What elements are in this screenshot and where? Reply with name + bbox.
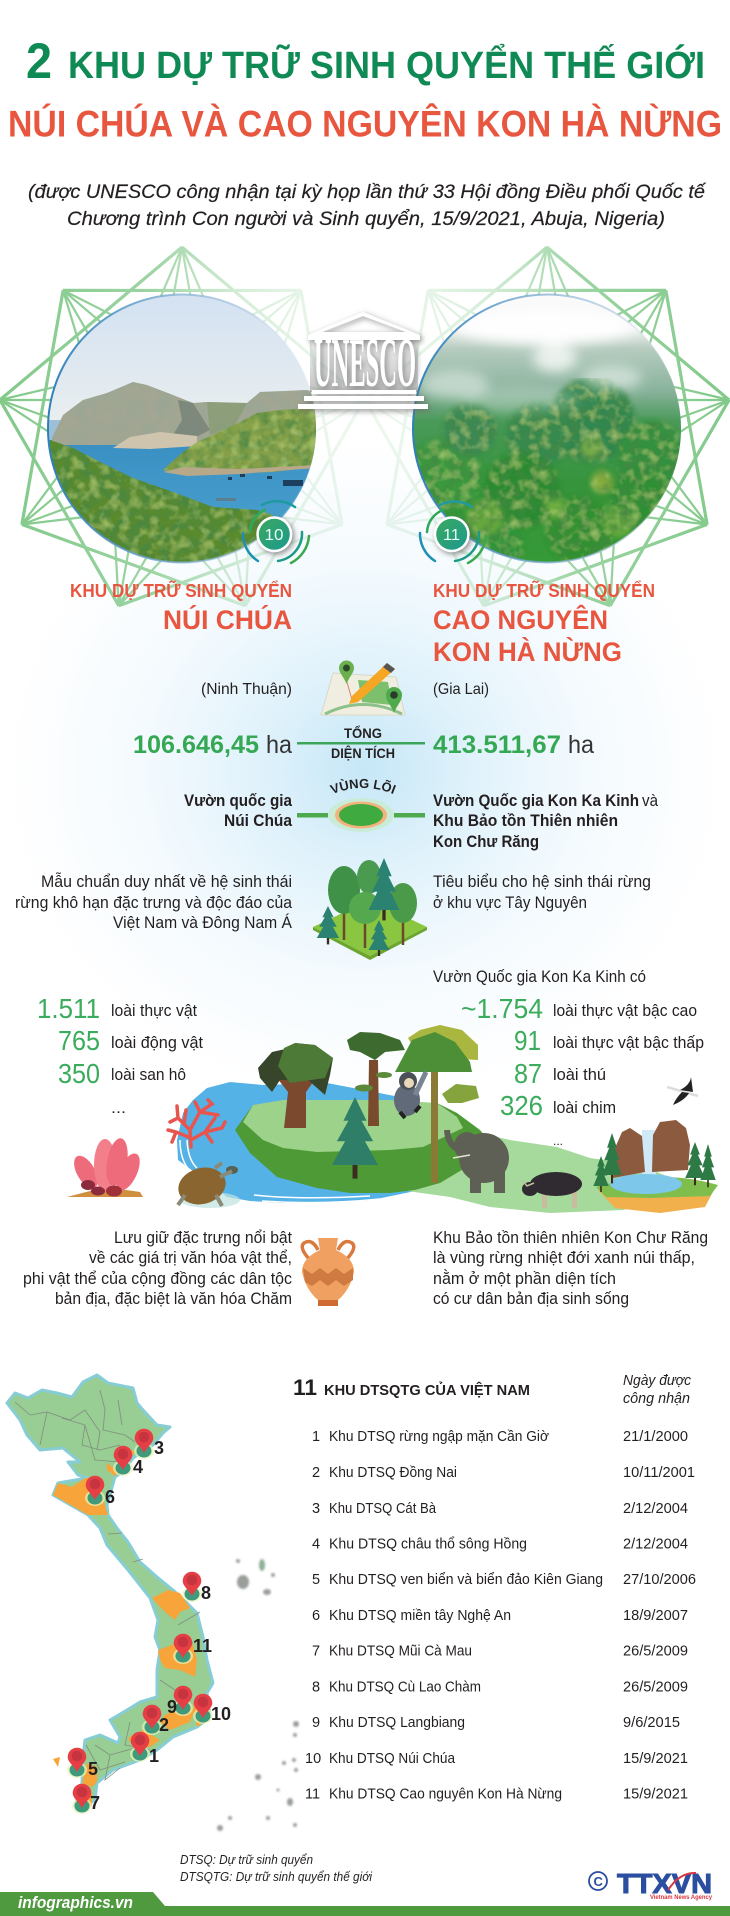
stats left xyxy=(37,993,203,1117)
left ecosystem text xyxy=(15,872,293,932)
heading left: Núi Chúa xyxy=(70,580,292,698)
badge 10 xyxy=(243,501,309,563)
list of 11 reserves: 4 xyxy=(312,1536,320,1552)
icon: Cham vase xyxy=(302,1238,354,1306)
province lines xyxy=(15,1390,200,1780)
pin numbers: 2 xyxy=(159,1715,169,1735)
monkey xyxy=(394,1072,426,1118)
list of 11 reserves: 7 xyxy=(312,1644,320,1660)
text right: Kon Chư Răng: Khu Bảo tồn thiên nhiên Kon Chư Răng xyxy=(433,1228,708,1247)
pin numbers: 3 xyxy=(154,1438,164,1458)
pin numbers xyxy=(88,1438,231,1813)
list of 11 reserves: Khu DTSQ Cát Bà xyxy=(329,1501,437,1517)
core zone right text: Khu Bảo tồn Thiên nhiên xyxy=(433,811,618,830)
heading right: Cao nguyên Kon Hà Nừng xyxy=(433,580,655,698)
stats right: loài chim xyxy=(553,1098,616,1117)
turtle xyxy=(174,1162,240,1210)
core zone right text: Vườn Quốc gia Kon Ka Kinh xyxy=(433,791,639,810)
heading left: Núi Chúa: NÚI CHÚA xyxy=(163,604,292,635)
list of 11 reserves: Khu DTSQ Mũi Cà Mau xyxy=(329,1644,472,1660)
stats right xyxy=(461,993,704,1148)
left ecosystem text: rừng khô hạn đặc trưng và độc đáo của xyxy=(15,893,293,912)
highlighted reserve provinces xyxy=(53,1448,210,1808)
total area xyxy=(133,726,594,761)
badge 11 xyxy=(420,501,486,563)
decorative star frame right xyxy=(364,246,730,608)
pin numbers: 6 xyxy=(105,1487,115,1507)
icon: map and pencil xyxy=(321,661,405,715)
list of 11 reserves: 8 xyxy=(312,1680,320,1696)
heading right: Cao nguyên Kon Hà Nừng: CAO NGUYÊN xyxy=(433,604,608,635)
pin numbers: 8 xyxy=(201,1583,211,1603)
list of 11 reserves: Khu DTSQ Núi Chúa xyxy=(329,1751,456,1767)
pins xyxy=(67,1429,213,1814)
biodiversity scene xyxy=(67,1025,718,1213)
total area: ha xyxy=(568,731,594,759)
list heading: Ngày được xyxy=(623,1373,692,1389)
list of 11 reserves: 2 xyxy=(312,1465,320,1481)
stats right: loài thú xyxy=(553,1065,606,1084)
list of 11 reserves: Khu DTSQ Langbiang xyxy=(329,1715,465,1731)
list heading: KHU DTSQTG CỦA VIỆT NAM xyxy=(324,1381,530,1399)
heading right: Cao nguyên Kon Hà Nừng: (Gia Lai) xyxy=(433,681,489,698)
red coral xyxy=(168,1100,225,1147)
stats right: 91 xyxy=(514,1025,541,1056)
list of 11 reserves: 10/11/2001 xyxy=(623,1465,695,1481)
pin numbers: 1 xyxy=(149,1746,159,1766)
water xyxy=(177,1082,420,1203)
stats left: loài động vật xyxy=(111,1033,203,1052)
stats right: ... xyxy=(553,1134,563,1148)
fir tree xyxy=(332,1097,378,1179)
text right: Kon Chư Răng xyxy=(433,1228,708,1308)
list of 11 reserves: 9 xyxy=(312,1715,320,1731)
list of 11 reserves: 26/5/2009 xyxy=(623,1680,688,1696)
land xyxy=(7,1375,213,1808)
core zone left text xyxy=(184,791,292,830)
culture text left: phi vật thể của cộng đồng các dân tộc xyxy=(23,1269,292,1288)
map of Vietnam xyxy=(7,1375,299,1831)
list of 11 reserves: 11 xyxy=(305,1787,320,1803)
tall tree xyxy=(395,1025,479,1183)
pin numbers: 5 xyxy=(88,1759,98,1779)
stats left: 350 xyxy=(58,1058,100,1089)
list of 11 reserves: 5 xyxy=(312,1572,320,1588)
water ripples xyxy=(180,1140,380,1203)
list of 11 reserves: 2/12/2004 xyxy=(623,1536,688,1552)
stats right: ~1.754 xyxy=(461,993,543,1024)
text right: Kon Chư Răng: là vùng rừng nhiệt đới xanh núi thấp, xyxy=(433,1248,695,1267)
culture text left: Lưu giữ đặc trưng nổi bật xyxy=(114,1228,292,1247)
footer bar xyxy=(0,1892,730,1916)
stats left: loài thực vật xyxy=(111,1001,197,1020)
TTXVN logo: C xyxy=(594,1874,604,1889)
core zone: VÙNG LÕI xyxy=(330,778,396,794)
decorative star frame left xyxy=(0,246,364,608)
core zone right text xyxy=(433,791,658,851)
core zone xyxy=(297,778,425,832)
stats left: 1.511 xyxy=(37,993,100,1024)
footnotes: DTSQTG: Dự trữ sinh quyển thế giới xyxy=(180,1870,373,1884)
icon: forest tile xyxy=(313,858,427,960)
baobab tree xyxy=(258,1043,333,1128)
left ecosystem text: Việt Nam và Đông Nam Á xyxy=(113,913,293,932)
stats left: 765 xyxy=(58,1025,100,1056)
total area: ha xyxy=(266,731,292,759)
badge 10: 10 xyxy=(264,527,284,544)
islands xyxy=(217,1559,299,1831)
list of 11 reserves: 15/9/2021 xyxy=(623,1751,688,1767)
list of 11 reserves: 15/9/2021 xyxy=(623,1787,688,1803)
list heading: công nhận xyxy=(623,1391,690,1407)
Kon Ka Kinh intro: Vườn Quốc gia Kon Ka Kinh có xyxy=(433,967,646,986)
total area: TỔNG xyxy=(344,726,382,741)
light green land right xyxy=(400,1133,700,1213)
pin numbers: 4 xyxy=(133,1457,143,1477)
bird xyxy=(667,1077,698,1105)
right ecosystem text: ở khu vực Tây Nguyên xyxy=(433,893,587,912)
waterfall island xyxy=(593,1120,718,1213)
title xyxy=(8,33,722,144)
heading left: Núi Chúa: (Ninh Thuận) xyxy=(201,681,292,698)
heading right: Cao nguyên Kon Hà Nừng: KHU DỰ TRỮ SINH QUYỂN xyxy=(433,580,655,601)
list of 11 reserves: 18/9/2007 xyxy=(623,1608,688,1624)
footnotes xyxy=(180,1853,373,1884)
list heading xyxy=(293,1373,692,1407)
title: KHU DỰ TRỮ SINH QUYỂN THẾ GIỚI xyxy=(68,42,705,87)
culture text left: về các giá trị văn hóa vật thể, xyxy=(89,1248,292,1267)
culture text left: bản địa, đặc biệt là văn hóa Chăm xyxy=(55,1289,292,1308)
subtitle: (được UNESCO công nhận tại kỳ họp lần thứ 33 Hội đồng Điều phối Quốc tế xyxy=(28,181,706,203)
pin numbers: 10 xyxy=(211,1704,231,1724)
list of 11 reserves: 21/1/2000 xyxy=(623,1429,688,1445)
pin numbers: 9 xyxy=(167,1697,177,1717)
culture text left xyxy=(23,1228,292,1308)
list of 11 reserves: Khu DTSQ ven biển và biển đảo Kiên Giang xyxy=(329,1572,603,1588)
list of 11 reserves: 3 xyxy=(312,1501,320,1517)
subtitle xyxy=(28,181,706,230)
subtitle: Chương trình Con người và Sinh quyển, 15/9/2021, Abuja, Nigeria) xyxy=(67,208,665,230)
right ecosystem text: Tiêu biểu cho hệ sinh thái rừng xyxy=(433,872,651,891)
core zone right text: và xyxy=(642,791,658,810)
stats right: loài thực vật bậc thấp xyxy=(553,1033,704,1052)
list of 11 reserves: 2/12/2004 xyxy=(623,1501,688,1517)
dark green hill xyxy=(235,1103,490,1193)
list of 11 reserves: 27/10/2006 xyxy=(623,1572,696,1588)
footnotes: DTSQ: Dự trữ sinh quyển xyxy=(180,1853,313,1867)
pin numbers: 11 xyxy=(193,1636,212,1656)
gaur xyxy=(522,1172,582,1208)
UNESCO logo xyxy=(298,312,428,409)
total area: 413.511,67 xyxy=(433,731,561,759)
infographic canvas: UNESCO xyxy=(314,325,416,402)
badge 11: 11 xyxy=(443,527,460,544)
list of 11 reserves: 9/6/2015 xyxy=(623,1715,680,1731)
footer bar: infographics.vn xyxy=(18,1893,133,1912)
list of 11 reserves: 26/5/2009 xyxy=(623,1644,688,1660)
list of 11 reserves xyxy=(305,1429,696,1803)
pink coral xyxy=(67,1137,145,1197)
list of 11 reserves: Khu DTSQ rừng ngập mặn Cần Giờ xyxy=(329,1429,549,1445)
list of 11 reserves: Khu DTSQ Cù Lao Chàm xyxy=(329,1680,481,1696)
elephant xyxy=(447,1130,509,1193)
pine tree xyxy=(347,1032,405,1126)
TTXVN logo: TTXVN xyxy=(617,1868,712,1899)
heading right: Cao nguyên Kon Hà Nừng: KON HÀ NỪNG xyxy=(433,636,622,667)
list of 11 reserves: 1 xyxy=(312,1429,320,1445)
stats right: 326 xyxy=(500,1090,543,1121)
core zone left text: Núi Chúa xyxy=(224,811,292,830)
light green hilltop xyxy=(243,1100,463,1152)
stats left: loài san hô xyxy=(111,1065,186,1084)
left ecosystem text: Mẫu chuẩn duy nhất về hệ sinh thái xyxy=(41,872,292,891)
heading left: Núi Chúa: KHU DỰ TRỮ SINH QUYỂN xyxy=(70,580,292,601)
pin numbers: 7 xyxy=(90,1793,100,1813)
total area: DIỆN TÍCH xyxy=(331,746,395,761)
stats right: loài thực vật bậc cao xyxy=(553,1001,697,1020)
list of 11 reserves: Khu DTSQ Cao nguyên Kon Hà Nừng xyxy=(329,1787,562,1803)
list of 11 reserves: Khu DTSQ châu thổ sông Hồng xyxy=(329,1536,527,1552)
list of 11 reserves: 10 xyxy=(305,1751,321,1767)
stats left: ... xyxy=(111,1100,126,1117)
list of 11 reserves: 6 xyxy=(312,1608,320,1624)
stats right: 87 xyxy=(514,1058,542,1089)
list heading: 11 xyxy=(293,1375,317,1400)
text right: Kon Chư Răng: có cư dân bản địa sinh sống xyxy=(433,1289,629,1308)
total area: 106.646,45 xyxy=(133,731,259,759)
list of 11 reserves: Khu DTSQ miền tây Nghệ An xyxy=(329,1608,511,1624)
TTXVN logo: Vietnam News Agency xyxy=(650,1894,712,1901)
list of 11 reserves: Khu DTSQ Đồng Nai xyxy=(329,1465,457,1481)
photo: Núi Chúa bay xyxy=(48,294,316,563)
core zone right text: Kon Chư Răng xyxy=(433,832,539,851)
TTXVN logo xyxy=(589,1868,712,1901)
core zone left text: Vườn quốc gia xyxy=(184,791,292,810)
photo: Kon Hà Nừng forest xyxy=(409,294,684,569)
text right: Kon Chư Răng: nằm ở một phần diện tích xyxy=(433,1269,616,1288)
title: 2 xyxy=(26,33,52,89)
right ecosystem text xyxy=(433,872,651,912)
